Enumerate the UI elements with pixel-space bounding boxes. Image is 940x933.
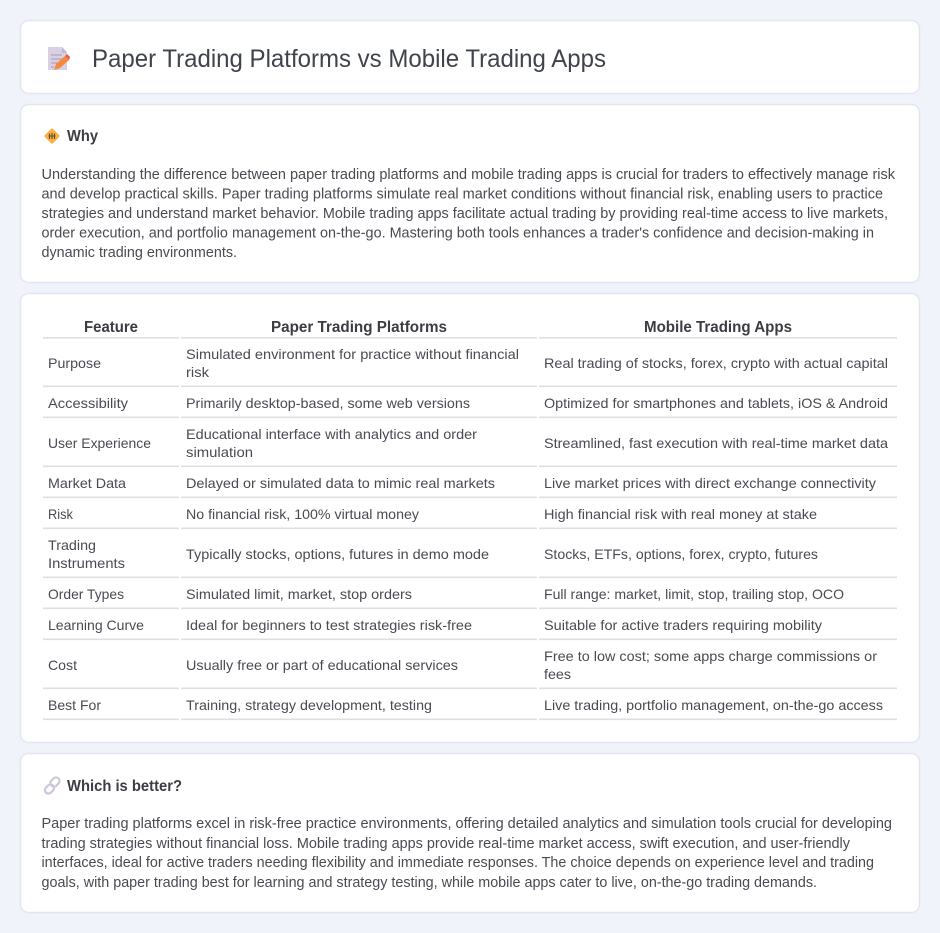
row: cost: Cost <box>48 657 77 673</box>
row: market data: Delayed or simulated data to mimic real markets <box>186 475 495 491</box>
row: risk: No financial risk, 100% virtual money <box>186 506 419 522</box>
text block: why explanation: order execution, and portfolio management on-the-go. Mastering both tools enhances a trader's confidence and decision-making in <box>42 226 874 242</box>
heading: why: Why <box>67 128 98 145</box>
row: order types: Simulated limit, market, stop orders <box>186 586 412 602</box>
row: purpose: risk <box>186 364 210 380</box>
panel: comparison table <box>20 294 920 742</box>
table header row: Paper Trading Platforms <box>271 319 447 336</box>
table header row: Mobile Trading Apps <box>644 319 792 336</box>
row: cost: fees <box>544 666 571 682</box>
row: accessibility: Accessibility <box>48 395 128 411</box>
row: trading instruments: Instruments <box>48 555 125 571</box>
row: market data: Market Data <box>48 475 126 491</box>
row: purpose: Simulated environment for practice without financial <box>186 346 519 362</box>
table header row: Feature <box>84 319 138 336</box>
icon: orange diamond sign <box>44 128 60 144</box>
row: purpose: Real trading of stocks, forex, crypto with actual capital <box>544 355 888 371</box>
row: learning curve: Ideal for beginners to test strategies risk-free <box>186 617 472 633</box>
icon: link <box>43 776 61 795</box>
icon: document with pencil <box>48 47 70 70</box>
row: best for: Best For <box>48 697 101 713</box>
row: learning curve: Suitable for active traders requiring mobility <box>544 617 822 633</box>
row: user experience: Educational interface with analytics and order <box>186 426 477 442</box>
row: purpose <box>48 346 888 380</box>
text block: why explanation: dynamic trading environments. <box>42 245 237 261</box>
row: learning curve: Learning Curve <box>48 617 144 633</box>
text block: why explanation <box>42 167 896 261</box>
text block: why explanation: Understanding the difference between paper trading platforms and mobile trading apps is crucial for traders to effectively manage risk <box>42 167 896 183</box>
row: accessibility <box>48 395 888 411</box>
row: trading instruments: Typically stocks, options, futures in demo mode <box>186 546 489 562</box>
row: cost <box>48 648 877 682</box>
row: trading instruments: Stocks, ETFs, options, forex, crypto, futures <box>544 546 818 562</box>
row: accessibility: Optimized for smartphones and tablets, iOS & Android <box>544 395 888 411</box>
row: user experience: simulation <box>186 444 253 460</box>
row: best for <box>48 697 883 713</box>
text block: why explanation: strategies and understand market behavior. Mobile trading apps facilitate actual trading by providing real-time access to live markets, <box>42 206 888 222</box>
table header row <box>84 319 792 336</box>
row: best for: Training, strategy development, testing <box>186 697 432 713</box>
row: accessibility: Primarily desktop-based, some web versions <box>186 395 470 411</box>
text block: verdict: interfaces, ideal for active traders needing flexibility and immediate responses. The choice depends on experience level and trading <box>42 855 874 871</box>
row: risk: Risk <box>48 506 74 522</box>
row: order types <box>48 586 844 602</box>
row: learning curve <box>48 617 822 633</box>
row: trading instruments <box>48 537 818 571</box>
title: Paper Trading Platforms vs Mobile Trading Apps <box>92 45 606 73</box>
panel: title header <box>20 20 920 94</box>
row: risk: High financial risk with real money at stake <box>544 506 817 522</box>
row: user experience <box>48 426 888 460</box>
row: order types: Order Types <box>48 586 124 602</box>
row: market data: Live market prices with direct exchange connectivity <box>544 475 876 491</box>
row: risk <box>48 506 817 522</box>
row: purpose: Purpose <box>48 355 101 371</box>
text block: verdict: goals, with paper trading best for learning and strategy testing, while mobile apps cater to live, on-the-go trading demands. <box>42 875 817 891</box>
text block: verdict <box>42 816 892 891</box>
row: order types: Full range: market, limit, stop, trailing stop, OCO <box>544 586 844 602</box>
text block: verdict: Paper trading platforms excel in risk-free practice environments, offering detailed analytics and simulation tools crucial for developing <box>42 816 892 832</box>
row: user experience: User Experience <box>48 435 151 451</box>
row: cost: Free to low cost; some apps charge commissions or <box>544 648 877 664</box>
row: trading instruments: Trading <box>48 537 96 553</box>
panel: which is better <box>20 754 920 912</box>
text block: why explanation: and develop practical skills. Paper trading platforms simulate real market conditions without financial risk, enabling users to practice <box>42 186 883 202</box>
panel: why <box>20 104 920 282</box>
text block: verdict: trading strategies without financial loss. Mobile trading apps provide real-time market access, swift execution, and user-friendly <box>42 836 851 852</box>
heading: which is better: Which is better? <box>67 778 182 795</box>
row: user experience: Streamlined, fast execution with real-time market data <box>544 435 888 451</box>
row: market data <box>48 475 876 491</box>
row: cost: Usually free or part of educational services <box>186 657 458 673</box>
row: best for: Live trading, portfolio management, on-the-go access <box>544 697 883 713</box>
